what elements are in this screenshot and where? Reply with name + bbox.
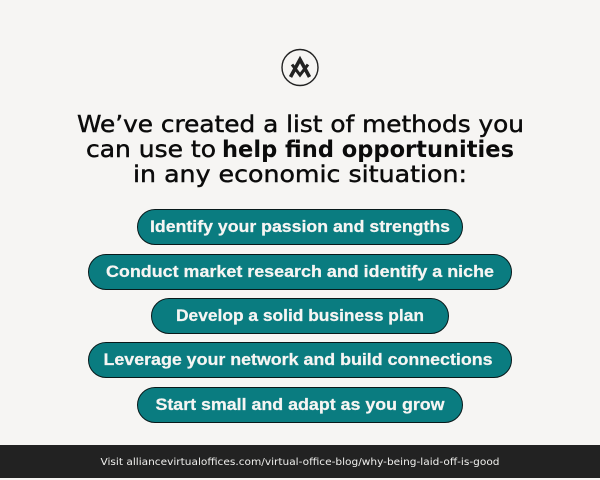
title: can use to: [86, 135, 216, 163]
icon: logo: [282, 50, 318, 86]
title: [77, 110, 524, 188]
pill: network: [88, 342, 512, 378]
footer bar: Visit alliancevirtualoffices.com/virtual-office-blog/why-being-laid-off-is-good: [100, 457, 500, 468]
pill: start small: [138, 388, 462, 422]
title: We’ve created a list of methods you: [77, 110, 524, 138]
footer bar: [0, 445, 600, 478]
pill: identify passion: Identify your passion and strengths: [150, 217, 450, 236]
title: help find opportunities: [222, 135, 514, 163]
pill: business plan: Develop a solid business plan: [176, 306, 424, 325]
title: in any economic situation:: [133, 160, 467, 188]
pill: start small: Start small and adapt as you grow: [156, 395, 446, 414]
pill: business plan: [152, 298, 448, 334]
pill: market research: [88, 254, 512, 290]
pill: market research: Conduct market research and identify a niche: [106, 262, 494, 281]
pill: network: Leverage your network and build connections: [104, 350, 492, 369]
pill: identify passion: [138, 210, 462, 244]
